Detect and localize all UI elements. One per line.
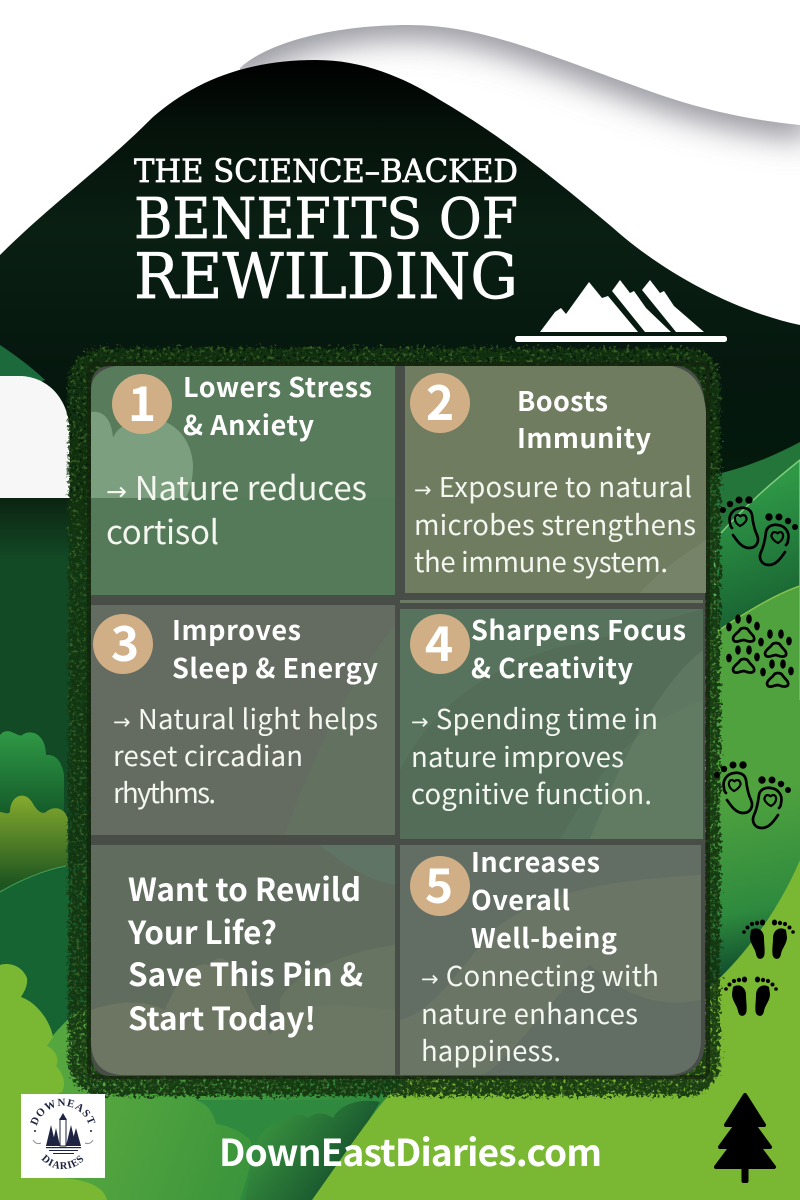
icon: solid footprints upper <box>742 920 795 959</box>
title <box>134 152 518 313</box>
gutters <box>91 366 400 1076</box>
heading 1: & Anxiety <box>183 404 314 443</box>
heading 3 <box>172 609 378 686</box>
dark mountain silhouette <box>0 60 800 520</box>
title: REWILDING <box>134 240 518 313</box>
left green hill <box>0 345 120 918</box>
heading 5: Increases <box>471 841 600 880</box>
icon: bare footprints top <box>720 496 798 565</box>
body 2: → Exposure to natural <box>414 465 692 505</box>
body 1: cortisol <box>106 506 219 554</box>
left bushes <box>0 731 100 1060</box>
right green hills <box>690 442 800 1000</box>
body 5: → Connecting with <box>421 954 659 994</box>
panel 1: lowers stress and anxiety <box>91 365 395 595</box>
body 4 <box>411 697 658 812</box>
body 2: the immune system. <box>414 540 668 580</box>
heading 5: Well-being <box>471 917 617 956</box>
call to action text: Want to Rewild <box>128 865 361 911</box>
title: THE SCIENCE–BACKED <box>134 152 518 190</box>
heading 3: Sleep & Energy <box>172 647 378 686</box>
white hill left <box>0 376 70 498</box>
logo: Downeast Diaries: DIARIES <box>41 1154 84 1170</box>
body 3 <box>113 697 378 811</box>
number badge 1 <box>112 365 172 435</box>
number badge 4: 4 <box>425 605 453 675</box>
number badge 5: 5 <box>425 847 453 917</box>
hedge border around panels <box>68 348 720 1096</box>
heading 1 <box>183 366 372 443</box>
bright bush bottom left <box>0 964 107 1200</box>
call to action text: Save This Pin & <box>128 950 363 996</box>
body 5 <box>421 954 659 1069</box>
title: BENEFITS OF <box>134 187 518 252</box>
body 5: happiness. <box>421 1029 561 1069</box>
body 3: reset circadian <box>113 734 303 774</box>
logo: Downeast Diaries: DOWNEAST <box>30 1098 96 1126</box>
panel 4: sharpens focus and creativity <box>400 600 703 839</box>
call to action text: Start Today! <box>128 994 316 1040</box>
body 5: nature enhances <box>421 992 638 1032</box>
icon: paw prints <box>726 614 794 687</box>
body 1: → Nature reduces <box>106 462 367 510</box>
heading 5 <box>471 841 617 956</box>
heading 4: & Creativity <box>471 647 634 686</box>
heading 4 <box>471 609 686 686</box>
heading 2: Boosts <box>517 380 608 419</box>
number badge 3: 3 <box>111 605 139 675</box>
icon: solid footprints lower <box>724 976 778 1016</box>
paper curl shadow <box>225 18 800 120</box>
body 4: cognitive function. <box>411 772 652 812</box>
call to action text <box>127 865 363 1040</box>
panel 2: boosts immunity <box>405 364 706 593</box>
panel 3: improves sleep and energy <box>91 605 395 835</box>
panel: call to action <box>91 845 395 1075</box>
number badge 2: 2 <box>426 364 454 434</box>
icon: mountains <box>515 280 727 342</box>
body 2: microbes strengthens <box>414 503 696 543</box>
body 2 <box>414 465 696 580</box>
heading 1: Lowers Stress <box>183 366 372 405</box>
number badge 4 <box>410 605 470 675</box>
icon: bare footprints middle <box>714 761 791 828</box>
footer website: DownEastDiaries.com <box>219 1123 602 1177</box>
body 3: rhythms. <box>113 771 216 811</box>
heading 2 <box>517 380 652 456</box>
panel dark outline <box>89 364 708 1077</box>
bottom green hill <box>45 975 420 1200</box>
bright green foreground hill <box>312 860 800 1200</box>
number badge 3 <box>93 605 153 675</box>
heading 5: Overall <box>471 879 570 918</box>
body 4: nature improves <box>411 735 624 775</box>
panel 5: increases overall well-being <box>400 841 701 1075</box>
body 4: → Spending time in <box>411 697 658 737</box>
number badge 2 <box>410 364 470 434</box>
icon: pine tree <box>716 1095 774 1181</box>
body 3: → Natural light helps <box>113 697 378 737</box>
body 1 <box>106 462 367 554</box>
heading 2: Immunity <box>517 417 652 456</box>
call to action text: Your Life? <box>127 908 277 954</box>
logo: Downeast Diaries <box>21 1094 105 1178</box>
heading 4: Sharpens Focus <box>471 609 686 648</box>
number badge 1: 1 <box>128 365 156 435</box>
heading 3: Improves <box>172 609 301 648</box>
number badge 5 <box>410 847 470 917</box>
